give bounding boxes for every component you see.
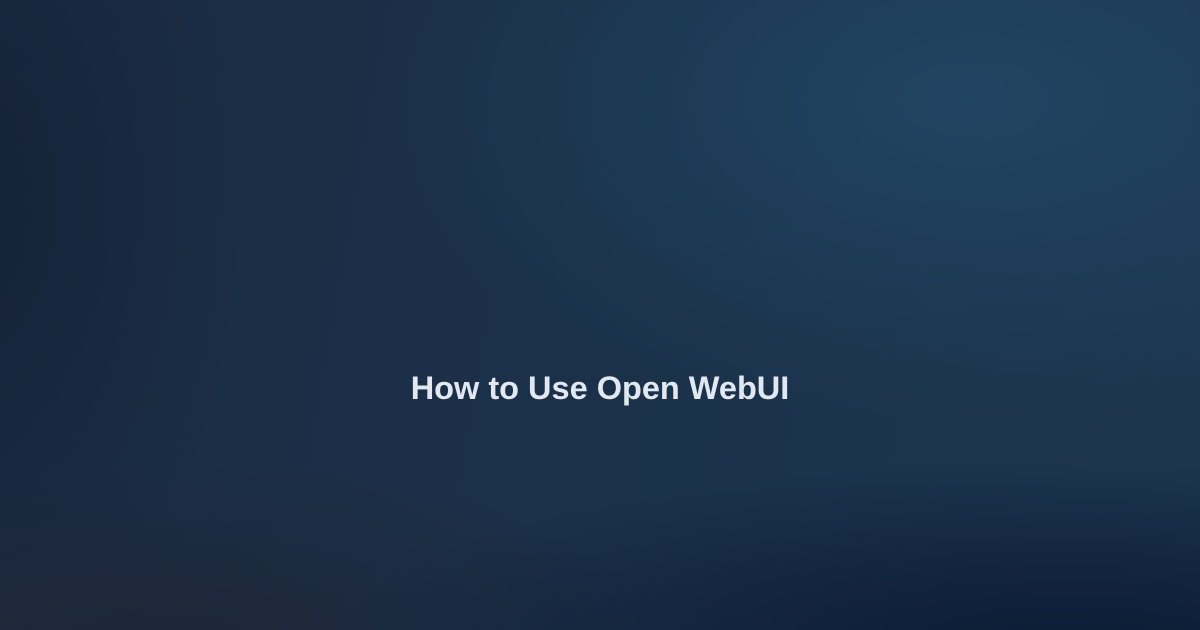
title: How to Use Open WebUI (411, 370, 789, 406)
